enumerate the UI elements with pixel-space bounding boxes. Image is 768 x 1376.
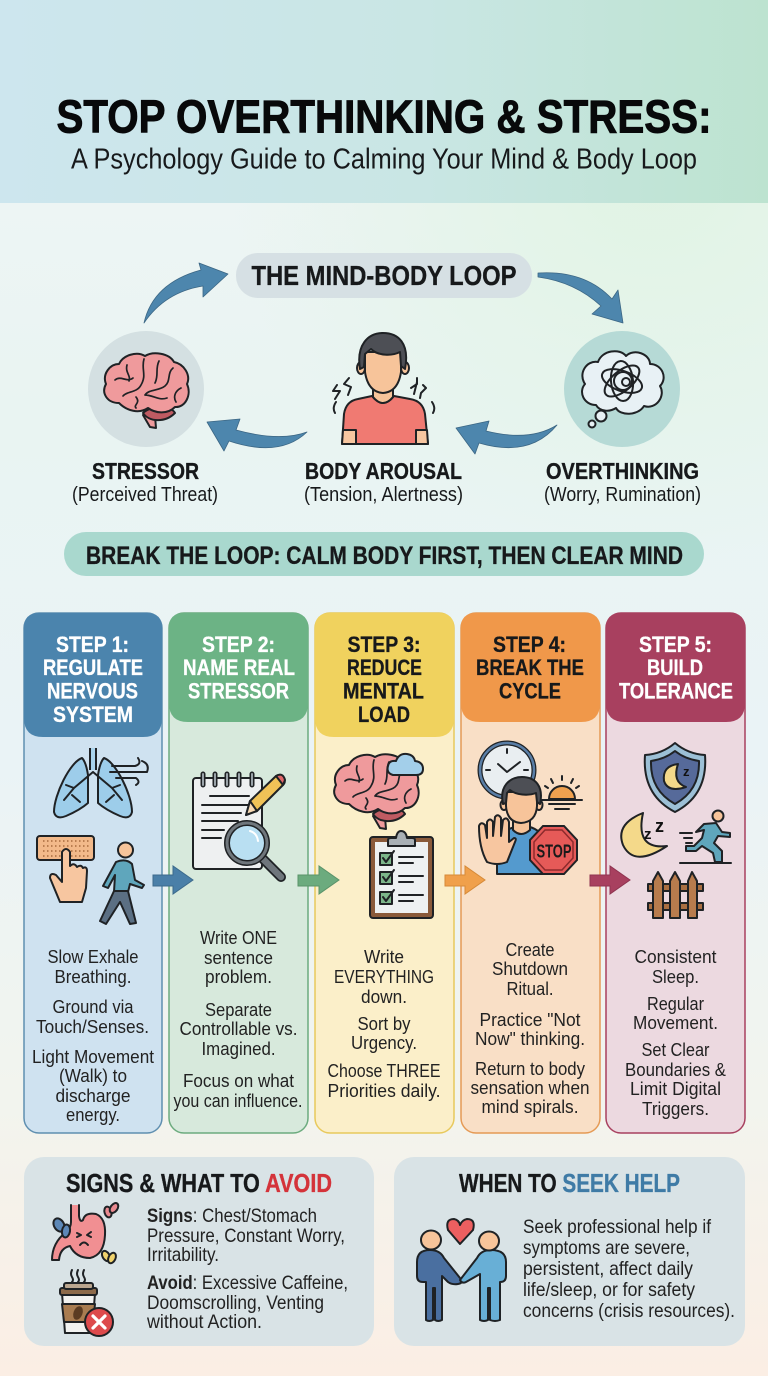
step 4 header: BREAK THE [476, 655, 584, 680]
icon: clock [480, 743, 534, 797]
label: body arousal: (Tension, Alertness) [304, 484, 463, 506]
step 1 header: SYSTEM [53, 702, 133, 727]
icon: walking person [100, 842, 144, 924]
text: step 4 actions: mind spirals. [482, 1096, 578, 1117]
text: step 1 actions: energy. [66, 1104, 120, 1125]
step 4 header [461, 613, 600, 722]
label: overthinking [544, 458, 701, 506]
icon: brain with cloud [334, 754, 423, 829]
text: step 3 actions: Urgency. [351, 1032, 417, 1053]
text: step 4 actions: Create [506, 939, 554, 960]
arrow: overthinking to body [456, 421, 557, 454]
text: step 3 actions: Sort by [358, 1013, 411, 1034]
text: step 1 actions: Light Movement [32, 1046, 154, 1067]
text: signs: Irritability. [147, 1244, 219, 1266]
icon: notebook, pencil and magnifier [193, 774, 285, 877]
icon: person with stop hand and sign: STOP [536, 842, 572, 862]
callout: break the loop [64, 532, 704, 576]
text: seek help advice: concerns (crisis resources). [523, 1300, 735, 1322]
step 1 header [24, 613, 162, 737]
text: avoid: without Action. [146, 1311, 262, 1333]
panel: when to seek help [394, 1157, 745, 1346]
text: avoid: Avoid: Excessive Caffeine, [147, 1272, 348, 1294]
icon: moon shield: z [683, 764, 690, 779]
step 3 header: REDUCE [347, 655, 422, 680]
text: step 3 actions: down. [361, 986, 407, 1007]
step 5 header: BUILD [647, 655, 703, 680]
text: signs: Signs: Chest/Stomach [147, 1205, 317, 1227]
arrow: step 2 to 3 [298, 866, 339, 894]
step 5 header [606, 613, 745, 722]
text: step 2 actions: Separate [205, 999, 272, 1020]
step 5 header: STEP 5: [639, 632, 712, 657]
arrow: step 1 to 2 [153, 866, 193, 894]
step 1 header: STEP 1: [56, 632, 129, 657]
text: step 3 actions: Choose THREE [328, 1060, 440, 1081]
icon: crescent moon with zz: z [644, 826, 652, 843]
text: seek help advice: life/sleep, or for safety [523, 1279, 695, 1301]
text: step 2 actions: problem. [205, 966, 272, 987]
text: step 5 actions: Regular [647, 993, 704, 1014]
text: step 5 actions: Boundaries & [625, 1059, 727, 1080]
step 4 header: STEP 4: [493, 632, 566, 657]
step 1 header: NERVOUS [47, 678, 138, 704]
text: step 4 actions [470, 939, 590, 1117]
text: step 1 actions: Touch/Senses. [36, 1016, 149, 1037]
step 2 header: NAME REAL [183, 655, 295, 680]
text: avoid: Doomscrolling, Venting [147, 1292, 324, 1314]
panel: signs and what to avoid [24, 1157, 374, 1346]
arrow: step 4 to 5 [590, 866, 630, 894]
text: step 2 actions: you can influence. [174, 1090, 302, 1111]
text: seek help advice: Seek professional help if [523, 1216, 712, 1238]
text: step 3 actions: EVERYTHING [334, 966, 434, 987]
text: step 3 actions [328, 946, 440, 1101]
text: step 4 actions: Practice "Not [480, 1009, 580, 1030]
text: step 2 actions [174, 927, 302, 1111]
icon: lungs [54, 748, 148, 817]
step 3 header: LOAD [358, 702, 410, 727]
text: step 1 actions: Breathing. [54, 966, 132, 987]
icon: two people with heart [417, 1219, 506, 1321]
text: seek help advice [523, 1216, 735, 1322]
panel: step 2 [169, 613, 308, 1133]
heading: the mind-body loop [236, 253, 532, 298]
text: step 1 actions [32, 946, 154, 1125]
text: step 4 actions: Now" thinking. [475, 1028, 585, 1049]
label: stressor [72, 458, 218, 506]
text: step 1 actions: discharge [56, 1085, 130, 1106]
step 3 header: STEP 3: [348, 632, 420, 657]
icon: clipboard checklist [370, 831, 433, 918]
panel: step 4 [461, 613, 600, 1133]
text: step 5 actions: Sleep. [652, 966, 699, 987]
text: seek help advice: symptoms are severe, [523, 1237, 690, 1259]
heading: the mind-body loop: THE MIND-BODY LOOP [252, 260, 516, 291]
text: signs: Pressure, Constant Worry, [147, 1225, 345, 1247]
icon: wooden fence [648, 872, 703, 918]
icon: coffee with cross [60, 1270, 113, 1336]
text: step 2 actions: Controllable vs. [180, 1018, 298, 1039]
text: step 3 actions: Priorities daily. [328, 1080, 440, 1101]
icon: person with stop hand and sign [479, 777, 577, 874]
arrow: title to overthinking [538, 273, 623, 323]
icon: crescent moon with zz [621, 813, 667, 857]
icon: runner [680, 810, 731, 863]
text: step 5 actions: Triggers. [642, 1098, 709, 1119]
label: overthinking: (Worry, Rumination) [544, 484, 701, 506]
text: step 3 actions: Write [364, 946, 404, 967]
text: step 5 actions: Set Clear [642, 1039, 710, 1060]
step 2 header: STRESSOR [188, 678, 289, 704]
step 3 header [315, 613, 454, 737]
arrow: step 3 to 4 [445, 866, 485, 894]
text: seek help advice: persistent, affect daily [523, 1258, 693, 1280]
text: step 4 actions: sensation when [470, 1077, 590, 1098]
step 3 header: MENTAL [343, 678, 424, 704]
icon: touch pad and hand [37, 836, 94, 902]
text: step 5 actions: Limit Digital [630, 1078, 721, 1099]
icon: moon shield [645, 743, 705, 812]
label: body arousal [304, 458, 463, 506]
title banner [0, 0, 768, 203]
text: step 5 actions: Consistent [634, 946, 716, 967]
label: stressor: STRESSOR [92, 458, 199, 484]
icon: stomach with butterflies [51, 1201, 120, 1264]
icon: tense person [333, 333, 434, 444]
arrow: stressor to title [144, 263, 228, 323]
text: avoid [146, 1272, 348, 1333]
text: step 1 actions: Ground via [52, 996, 134, 1017]
panel: step 3 [315, 613, 454, 1133]
label: body arousal: BODY AROUSAL [305, 458, 462, 484]
text: step 2 actions: Imagined. [202, 1038, 276, 1059]
icon: stressor brain [88, 331, 204, 447]
label: stressor: (Perceived Threat) [72, 484, 218, 506]
step 2 header [169, 613, 308, 722]
text: step 5 actions: Movement. [633, 1012, 718, 1033]
panel: step 5 [606, 613, 745, 1133]
step 1 header: REGULATE [43, 655, 143, 680]
step 2 header: STEP 2: [202, 632, 275, 657]
arrow: body to stressor [207, 419, 307, 451]
text: step 4 actions: Ritual. [506, 978, 554, 999]
heading: signs and avoid: SIGNS & WHAT TO AVOID [66, 1168, 332, 1198]
step 5 header: TOLERANCE [619, 678, 733, 704]
panel: step 1 [24, 613, 162, 1133]
icon: sunset [542, 776, 582, 809]
text: step 1 actions: Slow Exhale [48, 946, 138, 967]
text: step 4 actions: Shutdown [492, 958, 568, 979]
icon: overthinking cloud [564, 331, 680, 447]
heading: seek help: WHEN TO SEEK HELP [459, 1168, 680, 1198]
label: overthinking: OVERTHINKING [546, 458, 699, 484]
subtitle: A Psychology Guide to Calming Your Mind & Body Loop [71, 144, 697, 176]
text: step 1 actions: (Walk) to [59, 1065, 127, 1086]
text: step 2 actions: Focus on what [183, 1070, 294, 1091]
text: signs [147, 1205, 345, 1266]
text: step 2 actions: Write ONE [200, 927, 277, 948]
text: step 4 actions: Return to body [475, 1058, 586, 1079]
icon: crescent moon with zz: z [655, 816, 664, 836]
text: step 5 actions [625, 946, 727, 1119]
text: step 2 actions: sentence [204, 947, 273, 968]
step 4 header: CYCLE [499, 678, 561, 704]
